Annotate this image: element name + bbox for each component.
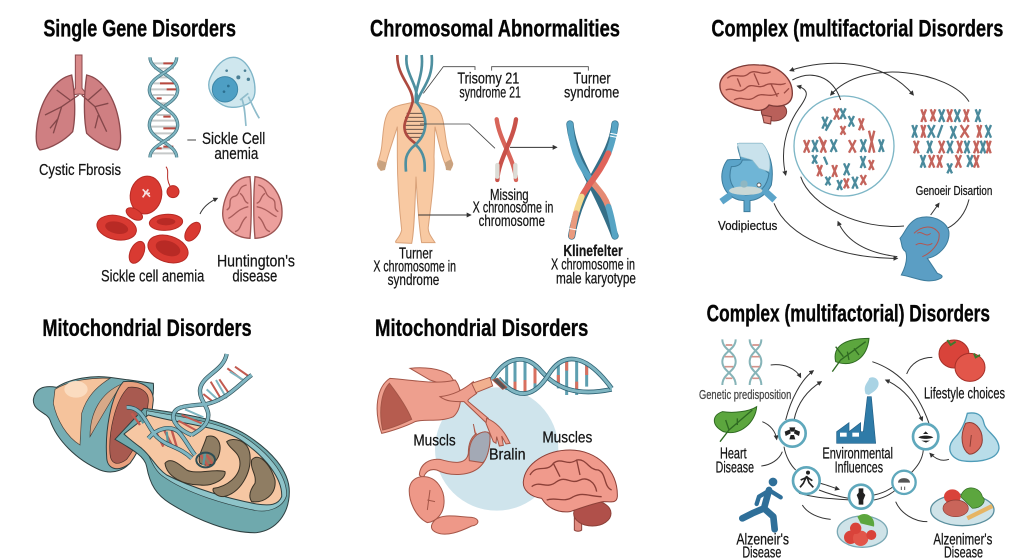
- network arrows: [774, 63, 969, 258]
- label: turner x chromosome: X chromosome in: [373, 259, 456, 276]
- label: environmental influences: Environmental: [822, 445, 893, 462]
- icon: tomatoes: [939, 340, 985, 381]
- icon: blue head: [900, 217, 949, 281]
- panel: mitochondrial disorders organs: [375, 316, 617, 534]
- leader lines: [420, 67, 588, 148]
- label: turner x chromosome: syndrome: [388, 272, 440, 289]
- label: missing x chromosome: X chronosome in: [473, 200, 553, 217]
- icon: lungs: [36, 55, 121, 150]
- label: missing x chromosome: Missing: [490, 187, 529, 204]
- heading: single gene disorders: Single Gene Disorders: [43, 17, 236, 43]
- illustration: human body with DNA: [377, 55, 453, 243]
- icon: blue organ: [721, 143, 775, 212]
- label: klinefelter: X chromosome in: [551, 256, 635, 273]
- heading: mitochondrial disorders: Mitochondrial Disorders: [375, 316, 588, 342]
- background circle: [435, 387, 558, 511]
- node: runner badge: [793, 467, 820, 494]
- icon: brain top view: [223, 177, 282, 238]
- panel: chromosomal abnormalities: [370, 17, 636, 289]
- label: muscls: Muscls: [413, 433, 456, 450]
- label: muscles: Muscles: [542, 429, 592, 446]
- illustration: DNA strand: [127, 354, 252, 467]
- label: heart disease: Heart: [720, 445, 747, 462]
- node: lower-right badge: [892, 471, 916, 494]
- label: missing x chromosome: chromosome: [479, 213, 545, 230]
- panel: single gene disorders: [36, 17, 295, 286]
- label: turner syndrome: Turner: [573, 70, 611, 87]
- icon: running figure: [742, 478, 781, 529]
- node: right badge: [913, 424, 938, 449]
- label: alzeneir's disease: Alzeneir's: [736, 531, 789, 548]
- panel: mitochondrial disorders illustration: [33, 316, 289, 533]
- label: klinefelter: [551, 243, 636, 287]
- label: trisomy 21: Trisomy 21: [457, 70, 519, 87]
- label: klinefelter: Klinefelter: [563, 243, 623, 260]
- label: huntington's disease: Huntington's: [217, 252, 295, 271]
- panel: complex multifactorial disorders cycle: [699, 302, 1005, 559]
- label: trisomy 21: [457, 70, 521, 101]
- illustration: mitochondrion: [33, 377, 289, 533]
- label: alzenimer's disease: Alzenimer's: [933, 531, 992, 548]
- chromosome cluster in circle: [794, 96, 894, 196]
- label: sickle cell anemia upper: [187, 129, 265, 163]
- label: alzeneir's disease: [736, 531, 789, 559]
- illustration: DNA helix: [492, 358, 612, 395]
- icon: flask with organ: [950, 413, 999, 461]
- label: turner syndrome: syndrome: [564, 84, 620, 101]
- icon: liver and arm: [377, 368, 510, 446]
- label: sickle cell anemia upper: anemia: [214, 144, 259, 163]
- label: turner x chromosome: Turner: [399, 245, 433, 262]
- icon: brain: [523, 450, 617, 531]
- label: brain: Bralin: [489, 446, 526, 463]
- arrow: [510, 146, 557, 149]
- label: missing x chromosome: [473, 187, 553, 230]
- icon: red blood cells: [95, 167, 204, 268]
- label: huntington's disease: [217, 252, 295, 286]
- label: klinefelter: male karyotype: [556, 270, 636, 287]
- label: turner syndrome: [564, 70, 620, 101]
- icon: leaf left: [714, 407, 757, 442]
- label: environmental influences: Influences: [835, 459, 883, 476]
- label: environmental influences: [822, 445, 893, 476]
- cycle arcs: [761, 357, 949, 522]
- icon: two DNA helices: [722, 339, 761, 385]
- icon: small chromosome: [497, 119, 516, 180]
- node: top-left badge: [779, 420, 806, 447]
- icon: large chromosome: [570, 124, 619, 236]
- icon: factory: [837, 377, 879, 443]
- icon: brain: [720, 65, 792, 124]
- label: alzenimer's disease: [933, 531, 992, 559]
- heading: mitochondrial disorders: Mitochondrial Disorders: [42, 316, 252, 342]
- icon: stomach and intestine: [409, 424, 490, 534]
- icon: DNA helix: [149, 57, 178, 157]
- label: vodipiectus: Vodipiectus: [718, 219, 777, 233]
- icon: food plate right: [931, 488, 994, 526]
- label: sickle cell anemia lower: Sickle cell anemia: [101, 267, 205, 286]
- label: huntington's disease: disease: [232, 267, 277, 286]
- label: trisomy 21: syndrome 21: [459, 84, 521, 101]
- label: sickle cell anemia upper: Sickle Cell: [202, 129, 265, 148]
- label: heart disease: Disease: [716, 459, 754, 476]
- arrow: [200, 198, 217, 214]
- label: genetic predisposition: Genetic predisposition: [699, 388, 791, 402]
- icon: leaf top: [832, 338, 869, 372]
- label: genoeir disartion: Genoeir Disartion: [916, 184, 992, 198]
- node: bottom badge: [849, 485, 873, 509]
- arrow: [418, 213, 471, 216]
- icon: cell: [209, 57, 259, 126]
- icon: food plate bottom: [837, 514, 887, 547]
- label: turner x chromosome: [373, 245, 456, 289]
- label: heart disease: [716, 445, 754, 476]
- heading: chromosomal abnormalities: Chromosomal Abnormalities: [370, 17, 620, 43]
- panel: complex multifactorial disorders network: [711, 17, 1003, 281]
- chromosome cluster right: [912, 109, 991, 173]
- label: cystic fibrosis: Cystic Fbrosis: [39, 162, 121, 179]
